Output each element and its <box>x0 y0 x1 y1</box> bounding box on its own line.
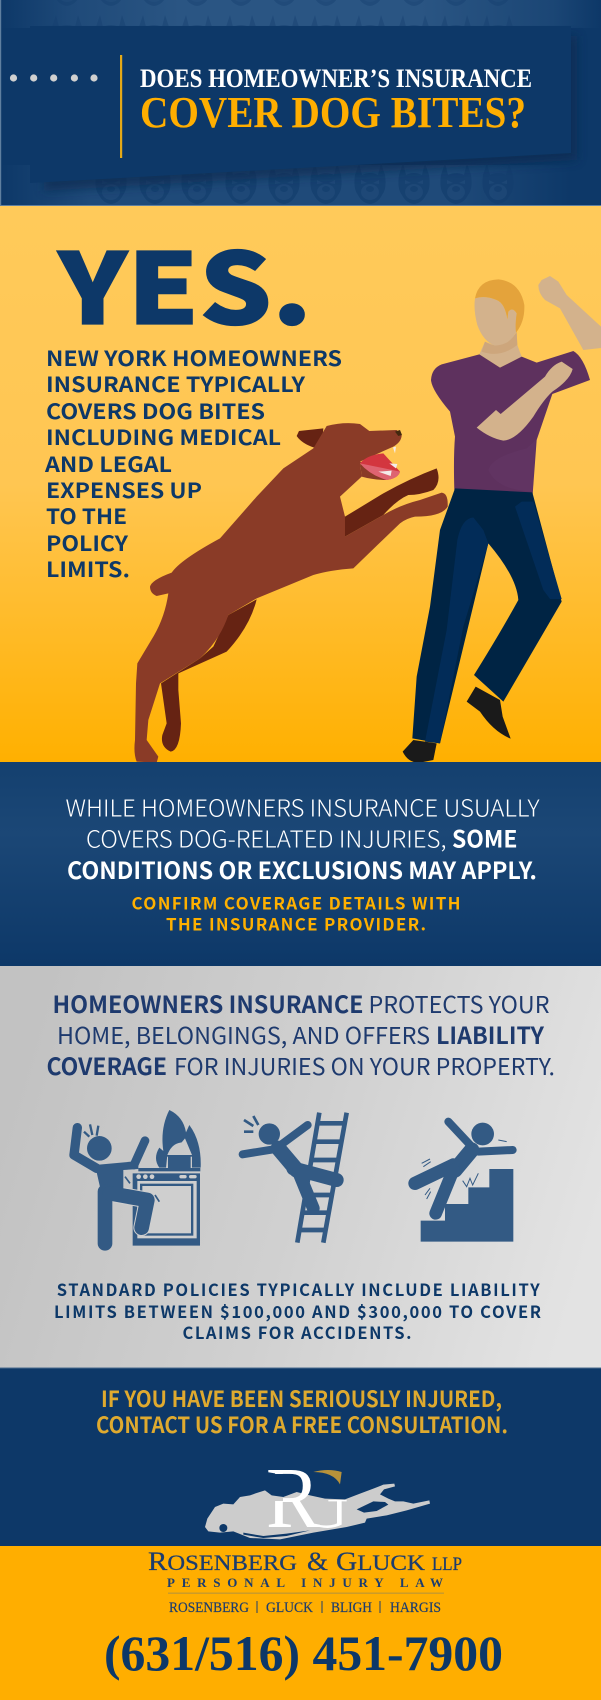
panel: call to action <box>0 1368 601 1546</box>
coverage statement: WHILE HOMEOWNERS INSURANCE USUALLY <box>66 790 540 824</box>
coverage statement: SOME <box>452 820 518 854</box>
partner names: GLUCK <box>266 1600 313 1616</box>
yes paragraph: POLICY <box>46 528 129 558</box>
yes paragraph: NEW YORK HOMEOWNERS <box>46 343 342 373</box>
protection statement: FOR INJURIES ON YOUR PROPERTY. <box>174 1048 555 1082</box>
icon: ladder fall <box>243 1113 347 1243</box>
yes paragraph: INCLUDING MEDICAL <box>46 422 281 452</box>
yes paragraph: COVERS DOG BITES <box>46 396 265 426</box>
firm name: GLUCK <box>336 1547 425 1576</box>
yes paragraph: AND LEGAL <box>44 449 172 479</box>
liability limits text: LIMITS BETWEEN $100,000 AND $300,000 TO COVER <box>54 1299 541 1323</box>
protection statement: LIABILITY <box>436 1017 544 1051</box>
liability limits text: STANDARD POLICIES TYPICALLY INCLUDE LIABILITY <box>57 1277 540 1301</box>
protection statement <box>46 986 555 1082</box>
consultation text: IF YOU HAVE BEEN SERIOUSLY INJURED, <box>101 1382 502 1414</box>
yes paragraph: INSURANCE TYPICALLY <box>46 369 306 399</box>
partner names: ROSENBERG <box>169 1600 249 1616</box>
panel: header <box>0 0 601 206</box>
illustration: man <box>403 276 601 763</box>
title banner <box>30 26 577 191</box>
title line 2: COVER DOG BITES? <box>140 88 526 137</box>
dots <box>10 74 98 82</box>
protection statement: PROTECTS YOUR <box>368 986 550 1020</box>
icon: stairs fall <box>415 1122 513 1242</box>
practice line: PERSONAL INJURY LAW <box>167 1575 443 1590</box>
partner names: HARGIS <box>390 1600 441 1616</box>
consultation text: CONTACT US FOR A FREE CONSULTATION. <box>96 1408 508 1440</box>
panel: yes answer <box>0 206 601 763</box>
yes paragraph: TO THE <box>46 501 127 531</box>
confirm coverage note: THE INSURANCE PROVIDER. <box>166 910 426 936</box>
partner names: BLIGH <box>331 1600 372 1616</box>
firm name: & <box>307 1547 328 1576</box>
coverage statement: COVERS DOG-RELATED INJURIES, <box>86 820 446 854</box>
yes paragraph: LIMITS. <box>46 554 130 584</box>
logo mark <box>205 1470 430 1540</box>
icons row <box>74 1110 513 1246</box>
firm name: LLP <box>432 1554 462 1575</box>
consultation text <box>96 1382 508 1440</box>
liability limits text: CLAIMS FOR ACCIDENTS. <box>182 1320 412 1344</box>
firm name <box>148 1547 462 1576</box>
coverage statement: CONDITIONS OR EXCLUSIONS MAY APPLY. <box>67 852 537 886</box>
divider line <box>120 55 122 158</box>
protection statement: HOMEOWNERS INSURANCE <box>52 986 364 1020</box>
liability limits text <box>54 1277 541 1344</box>
panel: footer <box>0 1546 601 1700</box>
protection statement: COVERAGE <box>46 1048 167 1082</box>
partner names <box>169 1600 441 1616</box>
title line 1: DOES HOMEOWNER’S INSURANCE <box>140 64 532 93</box>
yes paragraph: EXPENSES UP <box>46 475 202 505</box>
confirm coverage note <box>132 890 460 936</box>
yes heading: YES. <box>57 211 312 353</box>
panel: homeowners insurance <box>0 966 601 1368</box>
phone number: (631/516) 451-7900 <box>104 1625 503 1681</box>
illustration: dog <box>134 423 448 763</box>
coverage statement <box>66 790 540 886</box>
panel: coverage note <box>0 762 601 966</box>
firm name: ROSENBERG <box>148 1547 297 1576</box>
dog head pattern <box>51 0 514 204</box>
logo mark: R <box>266 1449 320 1546</box>
icon: kitchen fire <box>74 1110 201 1246</box>
yes paragraph <box>44 343 342 584</box>
protection statement: HOME, BELONGINGS, AND OFFERS <box>57 1017 430 1051</box>
confirm coverage note: CONFIRM COVERAGE DETAILS WITH <box>132 890 460 914</box>
